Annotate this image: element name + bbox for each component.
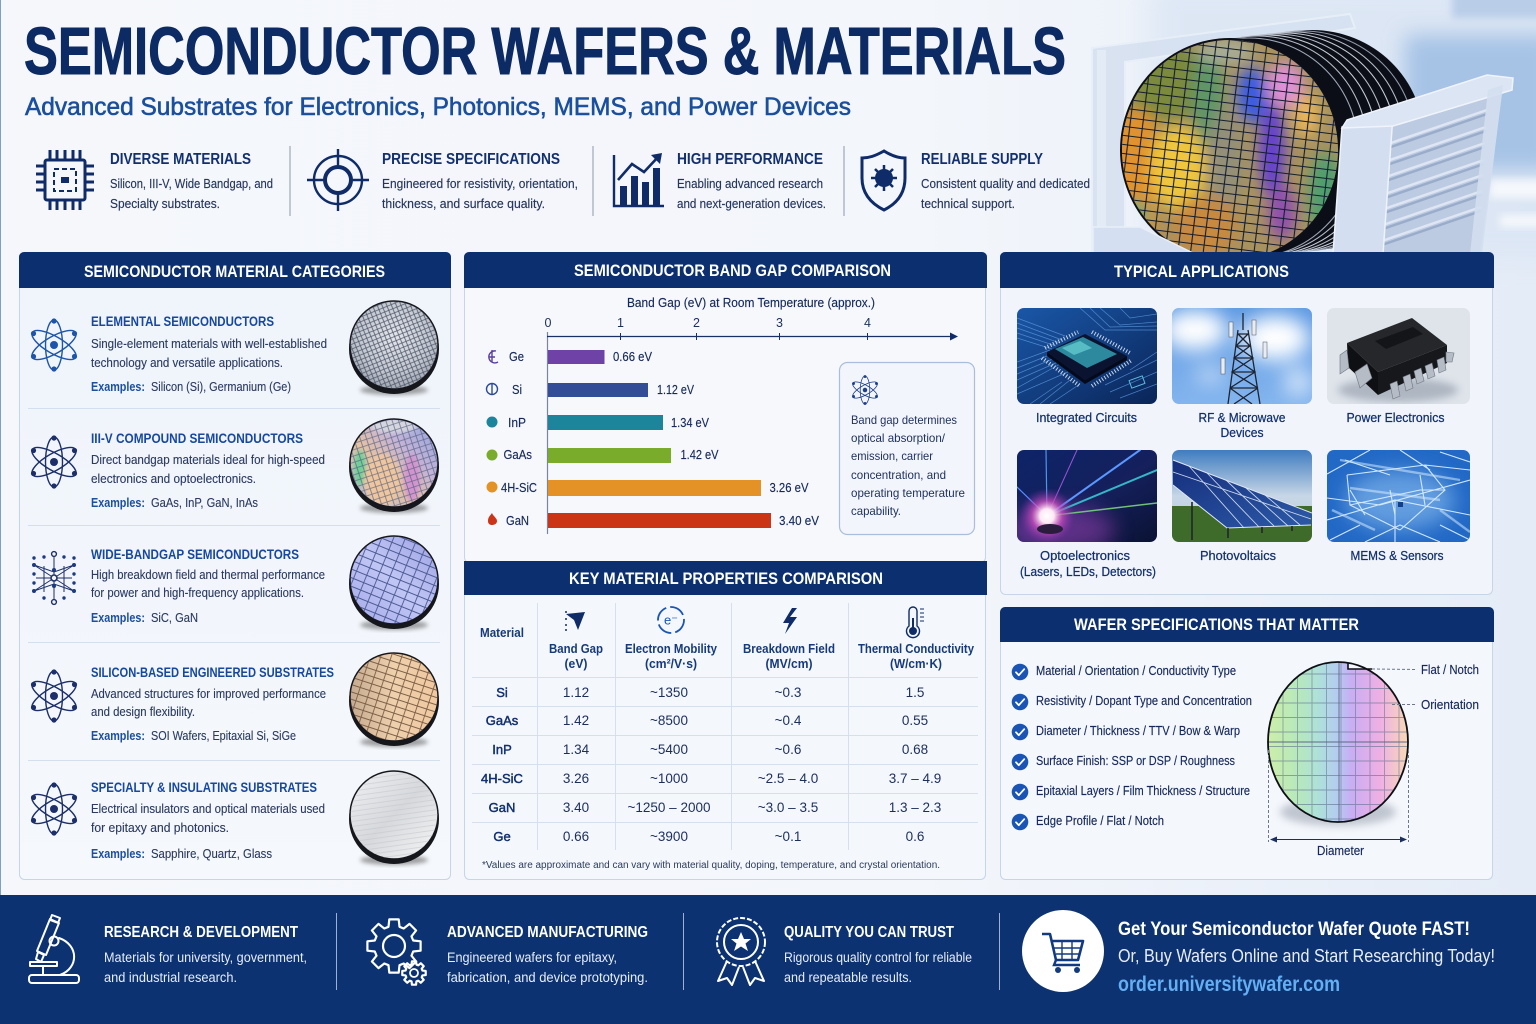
callout: band gap note: concentration, and bbox=[851, 468, 946, 482]
wafer: silicon bbox=[349, 301, 439, 395]
footer band bbox=[0, 895, 1536, 1024]
panel: band gap comparison bbox=[464, 252, 987, 562]
bar: 4H-SiC: 3.26 eV bbox=[770, 481, 809, 495]
icon: thermometer bbox=[907, 607, 924, 638]
RF label: Devices bbox=[1220, 425, 1264, 440]
table row: GaN: 1.3 – 2.3 bbox=[889, 800, 941, 815]
RF label bbox=[1198, 410, 1286, 440]
image: photovoltaics bbox=[1172, 450, 1312, 542]
table row: GaAs: ~0.4 bbox=[775, 713, 802, 728]
stacked black wafers bbox=[1131, 30, 1424, 259]
bar: Si bbox=[486, 383, 695, 397]
dimension: diameter: Diameter bbox=[1317, 844, 1364, 858]
front iridescent wafer bbox=[1120, 38, 1338, 252]
rear carrier frame bbox=[1092, 14, 1355, 252]
footer: quality bbox=[717, 918, 972, 985]
table header: Thermal Conductivity bbox=[858, 642, 974, 656]
category: wide-bandgap: SiC, GaN bbox=[151, 611, 198, 625]
category: specialty insulating: SPECIALTY & INSULATING SUBSTRATES bbox=[91, 780, 317, 795]
category: wide-bandgap: Examples: bbox=[91, 611, 145, 625]
callout: band gap note: optical absorption/ bbox=[851, 431, 946, 445]
table row: InP: ~5400 bbox=[650, 742, 688, 757]
bar: Si: 1.12 eV bbox=[657, 383, 695, 397]
footer: research and development: RESEARCH & DEVELOPMENT bbox=[104, 924, 298, 941]
feature: reliable supply bbox=[862, 151, 1090, 211]
feature: precise specifications: PRECISE SPECIFICATIONS bbox=[382, 151, 560, 168]
icon: band gap bbox=[566, 611, 585, 631]
table row: Ge: ~0.1 bbox=[775, 829, 801, 844]
bar: 4H-SiC bbox=[486, 480, 809, 496]
feature strip bbox=[36, 146, 1090, 216]
bar: InP: 1.34 eV bbox=[671, 416, 710, 430]
table header: (cm²/V·s) bbox=[645, 657, 697, 671]
axis: 0 bbox=[545, 316, 552, 330]
callout: band gap note: emission, carrier bbox=[851, 449, 933, 463]
wafer: specialty bbox=[349, 771, 439, 865]
table row: Si: ~0.3 bbox=[775, 685, 801, 700]
bar: GaAs: 1.42 eV bbox=[680, 448, 719, 462]
footer: advanced manufacturing: fabrication, and device prototyping. bbox=[447, 970, 648, 985]
checklist: Resistivity / Dopant Type and Concentration bbox=[1036, 694, 1252, 708]
category: specialty insulating: for epitaxy and photonics. bbox=[91, 821, 229, 835]
callout: orientation bbox=[1392, 698, 1479, 712]
callout: band gap note: operating temperature bbox=[851, 486, 965, 500]
category: wide-bandgap: High breakdown field and thermal performance bbox=[91, 568, 325, 582]
optoelectronics label: Optoelectronics bbox=[1040, 548, 1130, 563]
footer: research and development: Materials for university, government, bbox=[104, 950, 307, 965]
category: specialty insulating: Examples: bbox=[91, 847, 145, 861]
table row: GaN: ~3.0 – 3.5 bbox=[758, 800, 818, 815]
table row: Ge: Ge bbox=[493, 829, 511, 844]
table row: GaN bbox=[489, 800, 941, 815]
table row: GaN: ~1250 – 2000 bbox=[628, 800, 710, 815]
icon: gears bbox=[367, 919, 426, 985]
footer: quality: and repeatable results. bbox=[784, 970, 912, 985]
icon: shopping cart bbox=[1022, 910, 1104, 992]
bar: Si: Si bbox=[512, 383, 522, 397]
panel: typical applications: TYPICAL APPLICATIONS bbox=[1114, 263, 1289, 281]
category: silicon-based engineered bbox=[28, 653, 439, 747]
panel: wafer specifications that matter bbox=[1000, 607, 1494, 880]
category: elemental bbox=[28, 301, 439, 395]
table row: InP bbox=[492, 742, 928, 757]
panel: typical applications: Integrated Circuits bbox=[1036, 410, 1137, 425]
footer: advanced manufacturing: ADVANCED MANUFACTURING bbox=[447, 924, 648, 941]
category: silicon-based engineered: and design flexibility. bbox=[91, 705, 195, 719]
panel: semiconductor material categories bbox=[19, 252, 451, 880]
callout: orientation: Orientation bbox=[1421, 698, 1479, 712]
category: elemental: Silicon (Si), Germanium (Ge) bbox=[151, 380, 291, 394]
table row: 4H-SiC bbox=[481, 771, 941, 786]
bar: GaN bbox=[488, 513, 820, 528]
feature: reliable supply: RELIABLE SUPPLY bbox=[921, 151, 1043, 168]
optoelectronics label bbox=[1020, 548, 1156, 579]
panel: typical applications: Power Electronics bbox=[1346, 410, 1445, 425]
panel: key material properties comparison: KEY MATERIAL PROPERTIES COMPARISON bbox=[569, 570, 883, 588]
table grid bbox=[472, 603, 978, 850]
icon: rising bar chart bbox=[614, 153, 664, 206]
feature: high performance: HIGH PERFORMANCE bbox=[677, 151, 823, 168]
bar chart: Band Gap (eV) at Room Temperature (approx.) bbox=[627, 296, 875, 310]
wafer: wide bandgap bbox=[349, 536, 439, 630]
callout: band gap note bbox=[840, 362, 974, 534]
table row: Si bbox=[496, 685, 924, 700]
category: wide-bandgap: for power and high-frequency applications. bbox=[91, 586, 304, 600]
bar: GaN: GaN bbox=[506, 514, 529, 528]
icon: shield bbox=[862, 151, 905, 210]
feature: precise specifications: Engineered for resistivity, orientation, bbox=[382, 176, 578, 191]
table header: (MV/cm) bbox=[766, 657, 812, 671]
RF label: RF & Microwave bbox=[1198, 410, 1286, 425]
category: III-V compound: GaAs, InP, GaN, InAs bbox=[151, 496, 258, 510]
table row: 4H-SiC: 3.26 bbox=[563, 771, 589, 786]
callout: flat / notch: Flat / Notch bbox=[1421, 663, 1479, 677]
table row: InP: 1.34 bbox=[563, 742, 590, 757]
category: III-V compound: electronics and optoelectronics. bbox=[91, 472, 256, 486]
feature: high performance: and next-generation devices. bbox=[677, 196, 826, 211]
category: wide-bandgap: WIDE-BANDGAP SEMICONDUCTORS bbox=[91, 547, 299, 562]
checklist bbox=[1012, 664, 1252, 830]
icon: target bbox=[307, 149, 369, 211]
table row: 4H-SiC: ~2.5 – 4.0 bbox=[758, 771, 818, 786]
footer: advanced manufacturing bbox=[367, 919, 648, 985]
callout: band gap note: capability. bbox=[851, 504, 901, 518]
bar: 4H-SiC: 4H-SiC bbox=[501, 481, 537, 495]
table row: GaAs: ~8500 bbox=[650, 713, 688, 728]
category: III-V compound bbox=[28, 417, 439, 513]
feature: precise specifications: thickness, and surface quality. bbox=[382, 196, 545, 211]
feature: diverse materials: Silicon, III-V, Wide Bandgap, and bbox=[110, 176, 273, 191]
table row: 4H-SiC: 3.7 – 4.9 bbox=[889, 771, 941, 786]
category: silicon-based engineered: Advanced structures for improved performance bbox=[91, 687, 326, 701]
bar: GaAs: GaAs bbox=[504, 448, 532, 462]
footer: research and development bbox=[29, 915, 307, 985]
call to action bbox=[1022, 910, 1495, 996]
panel: typical applications: MEMS & Sensors bbox=[1350, 548, 1444, 563]
table row: Ge: ~3900 bbox=[650, 829, 688, 844]
panel: wafer specifications that matter: WAFER SPECIFICATIONS THAT MATTER bbox=[1074, 616, 1359, 634]
wafer diagram bbox=[1266, 660, 1479, 858]
title: SEMICONDUCTOR WAFERS & MATERIALS bbox=[24, 14, 1066, 89]
image: integrated circuits bbox=[1017, 308, 1157, 404]
category: wide-bandgap bbox=[32, 536, 439, 630]
category: elemental: ELEMENTAL SEMICONDUCTORS bbox=[91, 314, 274, 329]
hero image: wafer stack in carrier bbox=[1092, 14, 1513, 265]
checklist: Diameter / Thickness / TTV / Bow & Warp bbox=[1036, 724, 1240, 738]
feature: diverse materials bbox=[36, 150, 273, 211]
table row: 4H-SiC: ~1000 bbox=[650, 771, 688, 786]
bar: Ge bbox=[489, 350, 653, 364]
category: III-V compound: Direct bandgap materials ideal for high-speed bbox=[91, 453, 325, 467]
table header: Band Gap bbox=[549, 642, 603, 656]
feature: diverse materials: Specialty substrates. bbox=[110, 196, 220, 211]
panel: typical applications bbox=[1000, 252, 1494, 594]
feature: reliable supply: technical support. bbox=[921, 196, 1015, 211]
icon: electron bbox=[658, 607, 684, 633]
icon: lightning bbox=[783, 608, 797, 634]
category: specialty insulating bbox=[28, 771, 439, 865]
table header: Breakdown Field bbox=[743, 642, 835, 656]
feature: precise specifications bbox=[307, 149, 578, 211]
table row: GaAs: 1.42 bbox=[563, 713, 589, 728]
table header: Material bbox=[480, 626, 524, 640]
category: III-V compound: III-V COMPOUND SEMICONDUCTORS bbox=[91, 431, 303, 446]
footer: research and development: and industrial research. bbox=[104, 970, 237, 985]
table row: Si: ~1350 bbox=[650, 685, 688, 700]
callout: band gap note: Band gap determines bbox=[851, 413, 957, 427]
footer: advanced manufacturing: Engineered wafers for epitaxy, bbox=[447, 950, 617, 965]
category: elemental: Examples: bbox=[91, 380, 145, 394]
bar: Ge: Ge bbox=[509, 350, 524, 364]
checklist: Surface Finish: SSP or DSP / Roughness bbox=[1036, 754, 1235, 768]
table row: GaAs bbox=[486, 713, 928, 728]
icon: chip bbox=[36, 150, 94, 210]
table row: GaAs: GaAs bbox=[486, 713, 519, 728]
footer: quality: QUALITY YOU CAN TRUST bbox=[784, 924, 954, 941]
table row: InP: ~0.6 bbox=[775, 742, 801, 757]
feature: high performance bbox=[614, 151, 826, 211]
image: optoelectronics lasers bbox=[1017, 450, 1157, 542]
footnote: *Values are approximate and can vary with material quality, doping, temperature, and crystal orientation. bbox=[482, 860, 940, 871]
table row: GaN: GaN bbox=[489, 800, 515, 815]
axis: 1 bbox=[617, 316, 624, 330]
bar: Ge: 0.66 eV bbox=[613, 350, 653, 364]
table header: (eV) bbox=[564, 657, 588, 671]
category: elemental: technology and versatile applications. bbox=[91, 356, 283, 370]
panel: key material properties comparison bbox=[464, 561, 987, 880]
icon: electron: e⁻ bbox=[664, 612, 678, 628]
axis bbox=[545, 316, 958, 534]
wafer: engineered bbox=[349, 653, 439, 747]
callout: flat / notch bbox=[1372, 663, 1479, 677]
bar: InP bbox=[486, 415, 710, 430]
table header: (W/cm·K) bbox=[890, 657, 942, 671]
footer: quality: Rigorous quality control for reliable bbox=[784, 950, 972, 965]
table row: Ge bbox=[493, 829, 924, 844]
feature: reliable supply: Consistent quality and dedicated bbox=[921, 176, 1090, 191]
category: silicon-based engineered: SILICON-BASED ENGINEERED SUBSTRATES bbox=[91, 665, 334, 680]
call to action: order.universitywafer.com bbox=[1118, 973, 1340, 996]
panel: band gap comparison: SEMICONDUCTOR BAND GAP COMPARISON bbox=[574, 262, 891, 280]
table row: Si: 1.5 bbox=[906, 685, 924, 700]
axis: 2 bbox=[693, 316, 700, 330]
dimension: diameter bbox=[1268, 750, 1408, 858]
bar: GaN: 3.40 eV bbox=[779, 514, 820, 528]
category: specialty insulating: Sapphire, Quartz, Glass bbox=[151, 847, 272, 861]
category: silicon-based engineered: SOI Wafers, Epitaxial Si, SiGe bbox=[151, 729, 296, 743]
wafer: III-V bbox=[349, 417, 439, 513]
feature: high performance: Enabling advanced research bbox=[677, 176, 823, 191]
table row: 4H-SiC: 4H-SiC bbox=[481, 771, 523, 786]
axis: 4 bbox=[864, 316, 871, 330]
feature: diverse materials: DIVERSE MATERIALS bbox=[110, 151, 251, 168]
optoelectronics label: (Lasers, LEDs, Detectors) bbox=[1020, 564, 1156, 579]
image: MEMS bbox=[1327, 450, 1470, 542]
table row: InP: InP bbox=[492, 742, 512, 757]
table row: Ge: 0.66 bbox=[563, 829, 589, 844]
call to action: Get Your Semiconductor Wafer Quote FAST! bbox=[1118, 919, 1470, 940]
table row: Ge: 0.6 bbox=[906, 829, 924, 844]
icon: award badge bbox=[717, 918, 765, 985]
category: elemental: Single-element materials with well-established bbox=[91, 337, 327, 351]
category: specialty insulating: Electrical insulators and optical materials used bbox=[91, 802, 325, 816]
table row: InP: 0.68 bbox=[902, 742, 928, 757]
table header bbox=[480, 607, 974, 671]
bar: GaAs bbox=[486, 448, 719, 463]
table row: GaN: 3.40 bbox=[563, 800, 589, 815]
bar: InP: InP bbox=[508, 416, 526, 430]
category: silicon-based engineered: Examples: bbox=[91, 729, 145, 743]
image: power electronics bbox=[1327, 308, 1470, 404]
checklist: Material / Orientation / Conductivity Type bbox=[1036, 664, 1236, 678]
table row: GaAs: 0.55 bbox=[902, 713, 928, 728]
panel: typical applications: Photovoltaics bbox=[1200, 548, 1276, 563]
checklist: Edge Profile / Flat / Notch bbox=[1036, 814, 1164, 828]
table row: Si: Si bbox=[496, 685, 508, 700]
bar chart bbox=[486, 296, 958, 534]
subtitle: Advanced Substrates for Electronics, Photonics, MEMS, and Power Devices bbox=[25, 93, 851, 121]
panel: semiconductor material categories: SEMICONDUCTOR MATERIAL CATEGORIES bbox=[84, 263, 385, 281]
checklist: Epitaxial Layers / Film Thickness / Structure bbox=[1036, 784, 1250, 798]
table row: Si: 1.12 bbox=[563, 685, 589, 700]
image: RF tower bbox=[1163, 308, 1312, 404]
table header: Electron Mobility bbox=[625, 642, 717, 656]
category: III-V compound: Examples: bbox=[91, 496, 145, 510]
front carrier frame bbox=[1093, 75, 1513, 254]
icon: microscope bbox=[29, 915, 79, 983]
axis: 3 bbox=[776, 316, 783, 330]
